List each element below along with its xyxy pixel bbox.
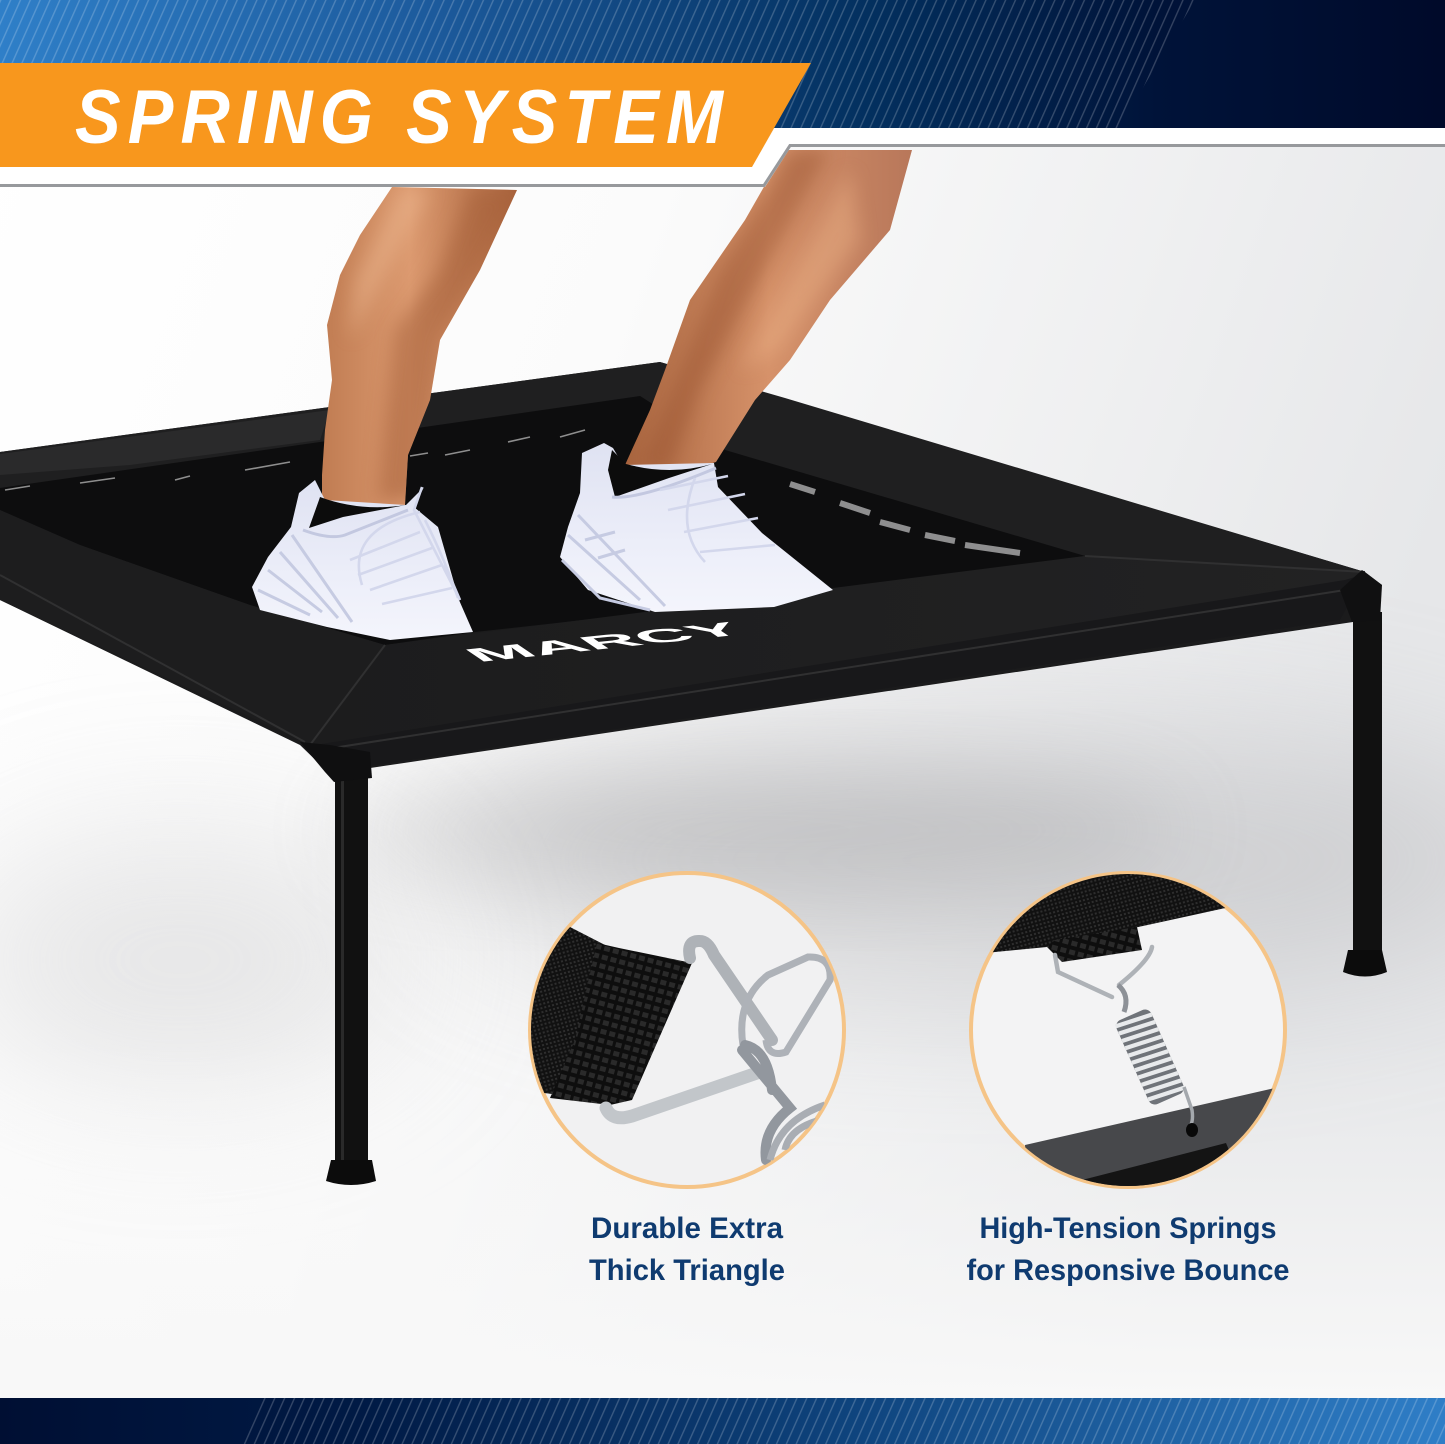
corner cap front: [300, 742, 372, 782]
pad seams: [0, 556, 1365, 750]
back right leg: [1343, 612, 1387, 976]
right shoe: [560, 443, 833, 612]
header band: [0, 0, 1445, 128]
footer band: [0, 1398, 1445, 1444]
chain links: [742, 1045, 790, 1160]
strap tab: [1047, 927, 1142, 962]
left pad highlight: [0, 410, 330, 475]
strap band: [992, 874, 1226, 952]
small ring: [1118, 985, 1126, 1012]
hook: [1184, 1087, 1192, 1128]
MARCY logo: MARCY: [455, 618, 755, 666]
right leg: [625, 150, 912, 480]
black strap: [550, 943, 692, 1105]
plate underside: [1084, 1143, 1229, 1186]
detail circle: triangle: [520, 873, 844, 1187]
steel plate: [1025, 1088, 1272, 1186]
triangle wire: [689, 941, 772, 1040]
header grey edge: [0, 146, 1445, 186]
caption: triangle: Thick Triangle: [589, 1254, 785, 1287]
trampoline: [0, 362, 1387, 1185]
lower ring: [770, 1105, 830, 1160]
frame outer pad: [0, 362, 1382, 774]
mesh fabric: [531, 927, 605, 1094]
title text: SPRING SYSTEM: [75, 76, 725, 160]
back and right top pads: [0, 362, 1365, 572]
left front pad: [0, 510, 385, 745]
front pad: [310, 556, 1365, 772]
left shoe: [252, 480, 473, 640]
caption: springs: for Responsive Bounce: [966, 1254, 1290, 1287]
plate hole: [1186, 1123, 1198, 1137]
corner cap right: [1340, 570, 1382, 622]
triangle wire: [1055, 947, 1152, 997]
triangle wire base: [606, 1073, 757, 1118]
caption: triangle: [589, 1212, 785, 1287]
header white strip: [0, 128, 1445, 187]
left leg: [322, 187, 520, 520]
title banner: [0, 63, 811, 167]
chain ring: [742, 957, 830, 1054]
floor shadow under trampoline: [340, 775, 1180, 885]
caption: springs: [966, 1212, 1290, 1287]
front leg: [326, 770, 376, 1185]
spring coil: [1114, 1007, 1186, 1107]
caption: triangle: Durable Extra: [591, 1212, 783, 1245]
springs back: [5, 430, 585, 490]
right sock: [608, 450, 712, 497]
mesh bed: [0, 396, 1085, 645]
left sock: [309, 497, 406, 528]
front pad edge: [315, 574, 1365, 772]
caption: springs: High-Tension Springs: [980, 1212, 1276, 1245]
springs right: [790, 484, 1020, 553]
detail circle: spring: [971, 868, 1300, 1200]
